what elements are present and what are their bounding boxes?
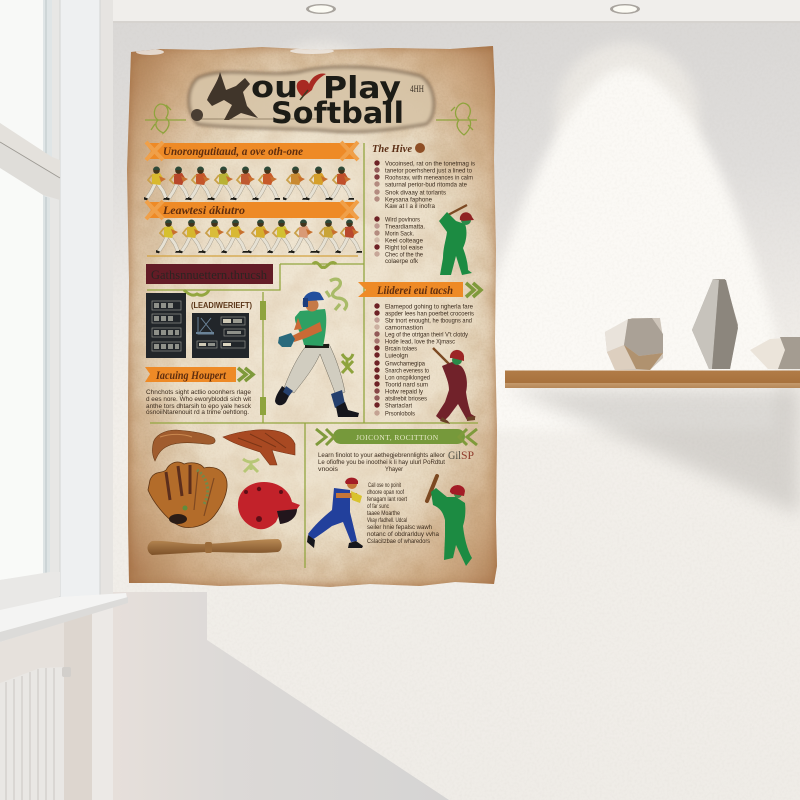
list: fielder tasks: Lon oncpiklonged — [385, 374, 430, 382]
list: fielder tasks: Hotw repaid ly — [385, 388, 424, 396]
radiator — [0, 667, 71, 800]
scoreboard heading: (LEADIWERIEFT) — [191, 301, 252, 310]
title word Softball: Softball — [271, 96, 404, 130]
green batter bottom — [427, 476, 472, 566]
decor: tall diamond vase — [692, 279, 738, 369]
scoring text block — [146, 389, 252, 416]
small label: SP — [461, 448, 474, 462]
list: fielder tasks: Luieolgn — [385, 352, 408, 360]
list: the hive upper: Snok divaay at torlants — [385, 190, 446, 196]
list: the hive upper: Kaw at I a il inofra — [385, 203, 435, 210]
window sill — [0, 593, 128, 800]
green side tabs — [260, 301, 266, 415]
batter silhouette — [191, 72, 320, 121]
open fielding glove — [223, 430, 295, 465]
heading: the hive: The Hive — [372, 143, 412, 155]
ribbon: fielder tasks: Liiderei eui tacsh — [376, 285, 453, 297]
position intro text — [318, 452, 445, 473]
list: the hive upper — [374, 160, 475, 210]
ribbon: scoring report — [145, 367, 253, 382]
list: fielder tasks — [374, 303, 474, 418]
position body text: Call ose no poinit — [368, 482, 401, 489]
small leather glove — [152, 430, 215, 461]
section divider lines — [147, 143, 478, 568]
list: fielder tasks: Sbr tnort enought, he tbougns and — [385, 318, 472, 324]
list: fielder tasks: Elamepod gohing to ngherla fare — [385, 304, 473, 310]
list: the hive upper: Keysana faphone — [385, 196, 432, 204]
list: fielder tasks: Snarch eveness to — [385, 368, 429, 374]
position body text: notanc of obdrarlduy vvha — [367, 531, 439, 538]
position body text: taaee Moarthe — [367, 510, 400, 517]
wooden bat — [148, 539, 282, 555]
runners row 2 — [156, 220, 362, 253]
position body text: seiler hnie fepalsc wawh — [367, 524, 432, 531]
decor: low faceted stone — [750, 337, 800, 369]
title scroll background — [189, 67, 434, 132]
wall shelf shadow — [507, 388, 800, 515]
poster paper texture — [125, 44, 500, 589]
dark red section banner: Gathsnnuettern.thrucsh — [151, 267, 267, 282]
list: fielder tasks: Prsonlobols — [385, 410, 415, 418]
ribbon: scoring report: Iacuing Houpert — [155, 370, 227, 382]
red heart flourish — [297, 73, 326, 100]
ribbon: fielder tasks — [358, 282, 481, 297]
scoreboard right — [192, 313, 249, 358]
list: the hive lower: Wird povlnors — [385, 216, 420, 224]
runners row 1 — [144, 166, 354, 200]
list: the hive upper: Roohsrav, with meneances in calm — [385, 174, 473, 182]
list: the hive lower: Morin Sack. — [385, 230, 414, 238]
maroon batter — [433, 348, 476, 424]
ceiling with spotlights — [105, 0, 800, 23]
position intro text: Learn finolot to your aethegjebrennlights alleor — [318, 452, 445, 459]
list: the hive upper: tanetor poerhsherd just a lined to — [385, 168, 472, 174]
list: the hive lower: Keel colteage — [385, 238, 423, 244]
list: fielder tasks: Shartaclart — [385, 402, 412, 410]
list: the hive lower: colaerpe ofk — [385, 258, 419, 265]
list: fielder tasks: atsilrebit brioses — [385, 396, 427, 402]
scoring text block: Chnchots sight actlio ooonhers rlage — [146, 389, 251, 396]
position body text: fenagam lant roert — [367, 496, 407, 503]
scoreboard left — [146, 293, 186, 358]
catcher mitt — [148, 462, 227, 528]
list: fielder tasks: aspder lees han poerbet crocoeris — [385, 310, 474, 318]
position intro text: vnoois — [318, 466, 338, 473]
scoring text block: ósnoiiNtarenouit rd a trime oehtlong. — [146, 409, 249, 416]
list: fielder tasks: Leg of the otrtgan theirl V't clotdy — [385, 332, 469, 338]
wooden shelf — [505, 370, 800, 388]
main pitcher figure — [275, 292, 359, 417]
scoring text block: d ees nore. Who eworybloddi sich wit — [146, 396, 251, 403]
list: the hive lower: Chec of the the — [385, 252, 423, 258]
green scroll ornament — [326, 279, 347, 310]
position intro text: Le ofiofhe you be inoothei k li hay ulurl PoRdtut — [318, 459, 445, 466]
title text: ou — [251, 70, 298, 104]
green banner: position — [316, 429, 477, 445]
list: fielder tasks: Toorid nard sum — [385, 382, 428, 388]
small label: Gil — [448, 448, 462, 462]
heading: the hive — [372, 143, 425, 153]
list: the hive lower — [374, 216, 425, 265]
ribbon: second drill row — [145, 201, 359, 219]
green cross ornament — [342, 354, 353, 373]
list: the hive lower: Tneardiamatta. — [385, 224, 425, 230]
cast window shadow on lower wall — [113, 592, 449, 800]
poster — [125, 44, 500, 589]
list: fielder tasks: Brcain tolaes — [385, 346, 417, 352]
pale green ornament — [243, 459, 259, 472]
right green ornament — [436, 103, 477, 135]
position body text: of far sunc — [367, 503, 389, 510]
ribbon: second drill row: Leawtesi ákiutro — [162, 205, 245, 217]
list: fielder tasks: Hode lead, love the Xjmasc — [385, 338, 455, 346]
scoring text block: anthe tors dhtarsih to epo yale hesck — [146, 403, 252, 410]
small stitch mark: 4HH — [410, 84, 424, 94]
red batting helmet — [238, 482, 300, 529]
title word Play: Play — [323, 71, 401, 106]
position body text: Cslacitzbae of wharedors — [367, 538, 430, 545]
title banner — [189, 67, 434, 132]
green banner: position: JOICONT, ROCITTION — [356, 433, 439, 442]
green batter top right — [439, 205, 474, 275]
blue pitcher — [307, 478, 363, 548]
list: the hive upper: Vocoinsed, rat on the tonetmag is — [385, 160, 475, 168]
position body text: Vkay rfadhell. Udcal — [367, 517, 407, 524]
window and reveal — [0, 0, 113, 612]
ribbon: first drill row: Unorongutitaud, a ove oth-one — [163, 146, 303, 158]
list: the hive upper: saturnal perior-bud ritomda ate — [385, 182, 467, 188]
list: the hive lower: Right tol eaise — [385, 244, 423, 252]
list: fielder tasks: camornastion — [385, 324, 423, 332]
position body text — [367, 482, 439, 545]
ribbon: first drill row — [145, 142, 359, 160]
left green ornament — [145, 104, 186, 134]
position intro text: Yhayer — [385, 466, 403, 473]
small label — [448, 448, 474, 462]
position body text: dhoore opan roof — [367, 489, 404, 496]
list: fielder tasks: Gnwchamegipa — [385, 360, 425, 368]
decor: faceted sphere — [605, 318, 663, 370]
